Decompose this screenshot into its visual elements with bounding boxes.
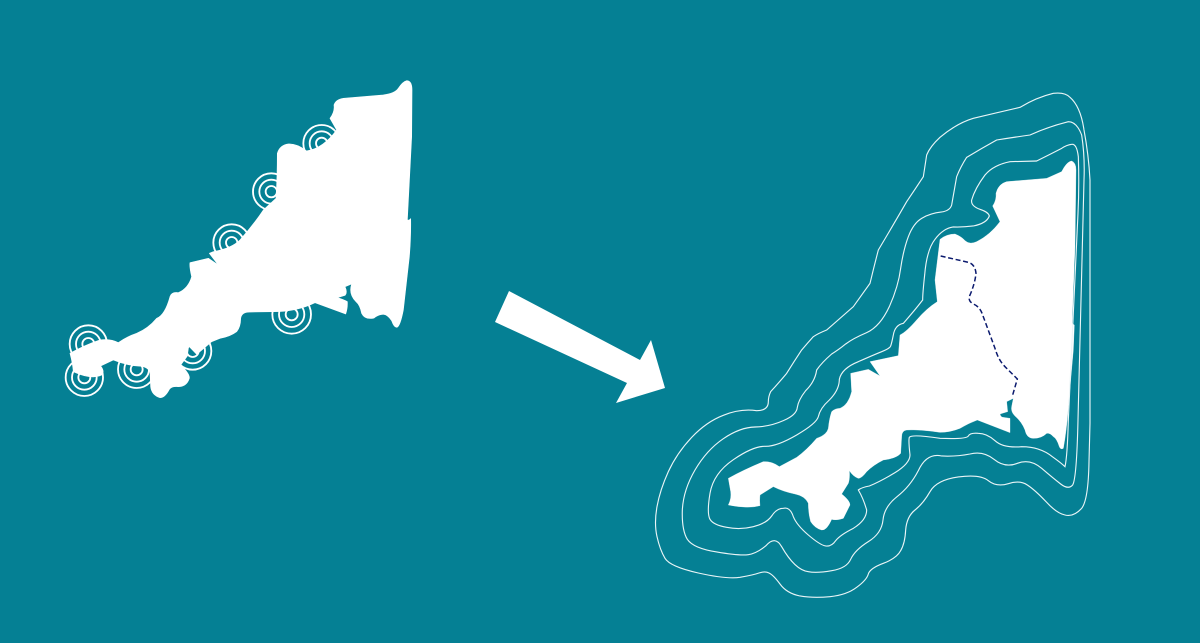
landmass: after	[728, 161, 1076, 530]
concentric rings along the coast	[66, 125, 340, 396]
contour line: middle	[682, 122, 1084, 572]
contour line: outer	[655, 93, 1090, 597]
arrow	[495, 291, 665, 403]
landmass: before	[70, 81, 412, 398]
dashed boundary line	[941, 256, 1017, 395]
panel: before map with erosion rings	[66, 81, 412, 398]
contour line: inner	[708, 144, 1079, 546]
panel: after map with contour lines	[655, 93, 1090, 597]
